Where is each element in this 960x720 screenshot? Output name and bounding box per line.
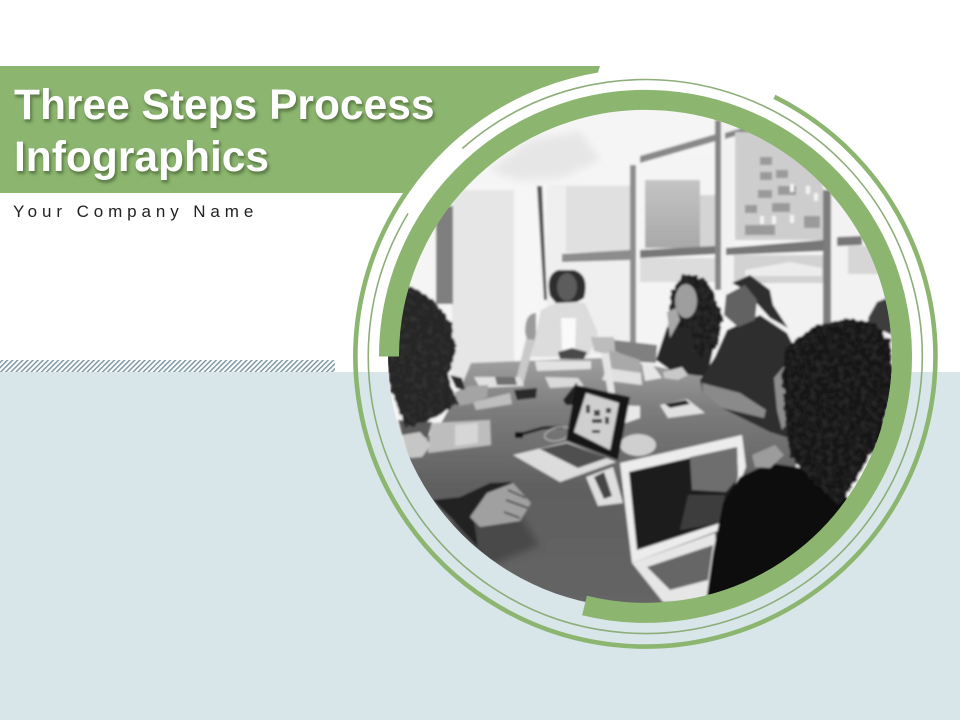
- woman hair: [549, 270, 586, 303]
- company name: Your Company Name: [13, 202, 258, 221]
- middle laptop base: [513, 442, 616, 482]
- large laptop base: [632, 533, 720, 602]
- woman 3 jacket: [700, 315, 795, 440]
- mullion 1: [630, 165, 636, 355]
- mullion 2: [715, 120, 721, 290]
- front woman body: [707, 463, 860, 600]
- middle laptop keyboard: [540, 443, 607, 468]
- back laptop base: [474, 377, 524, 388]
- building windows: [745, 157, 820, 235]
- title: [14, 82, 436, 184]
- grey building: [645, 180, 700, 248]
- mullion 3: [823, 190, 831, 360]
- black object: [563, 382, 577, 405]
- woman 2 top: [656, 325, 713, 377]
- dark chair: [612, 340, 657, 363]
- hatched strip: [0, 360, 335, 372]
- car highlights: [745, 262, 822, 276]
- background lower band: [0, 372, 960, 720]
- arm to hand: [455, 385, 488, 406]
- woman 2 hair: [668, 273, 723, 362]
- middle laptop display: [574, 393, 619, 450]
- woman 2 raised hand: [667, 308, 680, 338]
- screen reflection table: [680, 495, 725, 530]
- cup lamp: [591, 337, 615, 354]
- far right pane: [831, 200, 896, 350]
- lower street: [640, 258, 716, 282]
- centre bar: [640, 246, 716, 258]
- dark pillar edge: [537, 186, 547, 300]
- left wrist: [398, 420, 432, 438]
- front woman hand: [752, 445, 784, 468]
- street and cars: [734, 255, 823, 283]
- thin arc ring: [368, 80, 922, 634]
- thick arc ring: [389, 100, 902, 613]
- back laptop screen: [516, 339, 535, 385]
- photo: meeting around a table: [380, 100, 900, 620]
- phone and notes: [473, 393, 512, 410]
- window centre: [640, 155, 716, 345]
- woman face: [557, 273, 577, 301]
- room backdrop: [388, 110, 892, 500]
- title: Infographics: [14, 134, 269, 181]
- cup stem: [601, 353, 615, 393]
- large laptop lid: [620, 435, 746, 563]
- small paper: [586, 467, 623, 506]
- front notebook: [660, 399, 705, 418]
- pillar: [514, 186, 538, 356]
- blinds window: [547, 185, 630, 355]
- front left hair: [385, 286, 458, 428]
- clasped arm sleeves: [433, 482, 513, 547]
- tablet lower: [602, 368, 642, 385]
- papers: [545, 377, 584, 388]
- white disc: [615, 405, 640, 425]
- shadow under hands: [450, 518, 538, 564]
- table: [395, 358, 800, 620]
- back chair: [525, 313, 536, 340]
- large laptop keyboard: [647, 545, 713, 590]
- top bar right: [724, 128, 750, 140]
- cable plug: [515, 432, 523, 438]
- back laptop keyboard: [495, 377, 517, 385]
- woman head of table jacket: [531, 302, 598, 357]
- sleeve band: [450, 375, 465, 390]
- far right man: [868, 298, 892, 335]
- front woman hair: [782, 318, 895, 505]
- large laptop screen: [629, 447, 738, 550]
- wall panel: [436, 206, 453, 304]
- bright ground right: [734, 283, 823, 353]
- finger shadows: [504, 490, 528, 518]
- big building: [735, 132, 823, 240]
- white column 2: [721, 125, 734, 295]
- woman shirt: [561, 318, 576, 350]
- window bar left: [562, 250, 630, 262]
- outer arc ring: [355, 97, 935, 647]
- right bar: [726, 240, 823, 255]
- woman 2 lower hand: [663, 367, 688, 380]
- front woman face edge: [774, 365, 790, 430]
- slanted top bar: [640, 134, 716, 163]
- building strip: [700, 195, 715, 248]
- woman 2 face: [675, 284, 697, 318]
- notebook: [535, 361, 591, 371]
- title banner: [0, 66, 600, 193]
- left wall: [452, 190, 514, 380]
- far right bar: [837, 236, 862, 246]
- cable: [515, 427, 563, 436]
- far right street: [848, 245, 878, 274]
- wireless hub: [545, 427, 570, 441]
- woman 3 hair: [732, 275, 788, 328]
- patterned plate: [620, 434, 656, 456]
- display icons: [586, 405, 611, 433]
- left hand: [402, 432, 431, 458]
- tablet: [428, 420, 491, 453]
- middle laptop screen frame: [566, 385, 630, 460]
- woman hands: [558, 348, 587, 359]
- screen reflection: [690, 447, 738, 492]
- phone on notebook: [665, 400, 690, 408]
- blinds shade: [566, 186, 630, 252]
- tablet highlight: [455, 423, 478, 446]
- paper image: [594, 472, 612, 499]
- tablet on stand: [602, 350, 642, 385]
- ceiling shapes: [496, 134, 596, 179]
- clasped hands: [470, 483, 531, 527]
- woman 3 hands: [702, 383, 766, 418]
- back white paper: [642, 364, 662, 381]
- title: Three Steps Process: [14, 82, 434, 129]
- black device: [514, 388, 537, 400]
- woman 3 face: [724, 285, 757, 327]
